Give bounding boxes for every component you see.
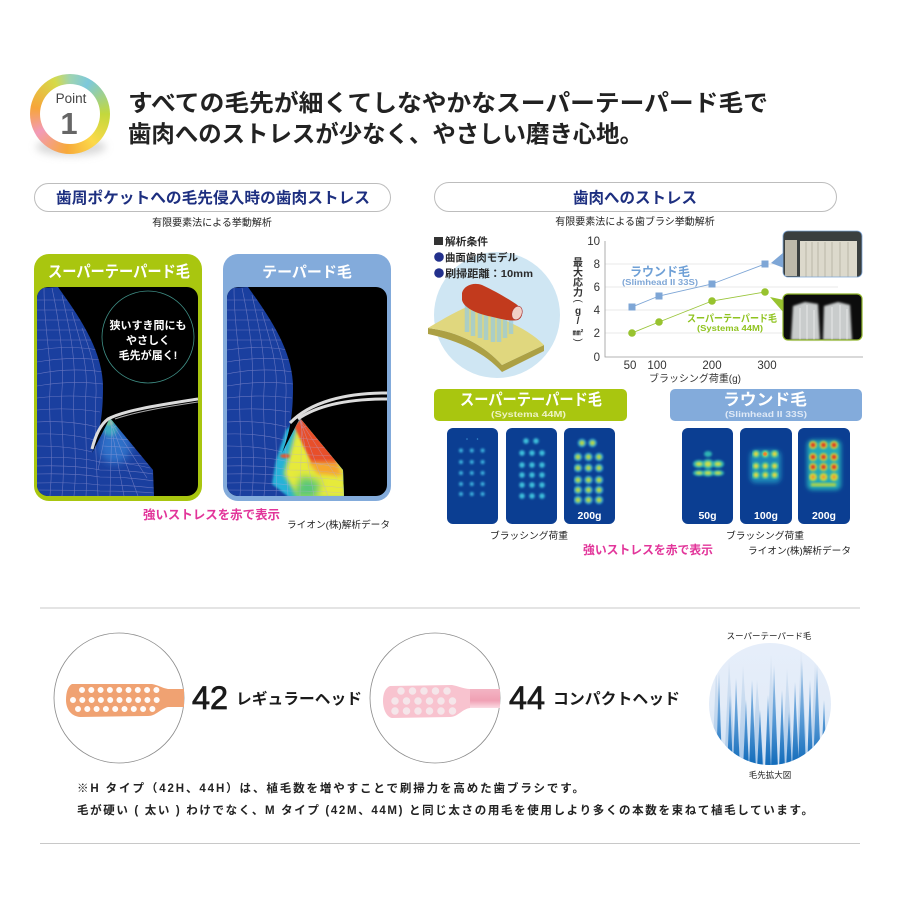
label: 44 compact head: [509, 680, 680, 716]
header: super tapered Systema 44M: (Systema 44M): [491, 409, 566, 419]
y axis labels: 10: [587, 236, 600, 248]
gum model: high stress: [227, 287, 387, 498]
badge: Point 1: Point: [56, 91, 87, 106]
subheading left: 有限要素法による挙動解析: [152, 216, 272, 229]
illustration: bristle tips enlarged: [709, 643, 831, 770]
y axis title: 応: [573, 277, 583, 289]
label: 42 regular head: 42: [192, 680, 228, 716]
badge: Point 1: 1: [60, 106, 78, 141]
y axis title: /: [577, 316, 580, 327]
heatmap: round 200g: 200g: [812, 510, 836, 522]
y axis labels: 6: [594, 282, 600, 294]
y axis title: 最: [573, 257, 583, 269]
label: brushing load right: ブラッシング荷重: [726, 530, 804, 542]
panel: super tapered bristle: [34, 254, 202, 501]
line chart: maximum stress vs brushing load: [572, 231, 863, 385]
photo: round bristle tips: [771, 231, 862, 277]
heading pill: gum stress in pocket: 歯周ポケットへの毛先侵入時の歯肉ストレス: [56, 188, 370, 207]
y axis labels: 0: [594, 352, 600, 364]
y axis title: (: [572, 299, 583, 303]
callout: reaches narrow gaps: 毛先が届く!: [119, 348, 177, 362]
label: 42 regular head: レギュラーヘッド: [236, 690, 362, 708]
series: super tapered bristle: スーパーテーパード毛: [687, 312, 777, 325]
y axis title: g: [575, 306, 581, 317]
heatmap: round 50g: 50g: [698, 510, 717, 522]
source note right: ライオン(株)解析データ: [748, 545, 851, 557]
note: red shows strong stress: 強いストレスを赤で表示: [143, 507, 280, 522]
x axis labels: [624, 360, 777, 372]
series: super tapered bristle: (Systema 44M): [697, 324, 763, 333]
y axis title: ㎜²: [573, 328, 584, 337]
panel: super tapered bristle: スーパーテーパード毛: [48, 263, 190, 281]
label: 44 compact head: 44: [509, 680, 545, 716]
label: enlarged tip view: 毛先拡大図: [749, 770, 791, 780]
analysis conditions: 刷掃距離：10mm: [445, 267, 533, 280]
y axis title: 力: [573, 286, 583, 299]
label: 44 compact head: コンパクトヘッド: [553, 690, 680, 708]
panel: tapered bristle: テーパード毛: [262, 264, 352, 281]
x axis labels: 50: [624, 360, 636, 372]
y axis labels: [587, 236, 601, 364]
note text: 毛が硬い ( 太い ) わけでなく、M タイプ (42M、44M) と同じ太さの用毛を使用しより多くの本数を束ねて植毛しています。: [77, 803, 813, 817]
heading pill: gum stress: 歯肉へのストレス: [573, 188, 697, 207]
x axis title: ブラッシング荷重(g): [649, 372, 741, 385]
heading pill: gum stress in pocket: [34, 184, 390, 212]
heatmap: super tapered 50g: [447, 428, 498, 524]
heatmap: round 100g: [740, 428, 792, 524]
photo: super tapered bristle tips: [770, 294, 862, 340]
heading pill: gum stress: [434, 182, 836, 212]
header: super tapered Systema 44M: [434, 389, 627, 421]
label: brushing load left: ブラッシング荷重: [490, 530, 568, 542]
analysis conditions: 曲面歯肉モデル: [445, 251, 518, 264]
header: round Slimhead II 33S: [670, 389, 862, 421]
y axis labels: 4: [594, 305, 601, 317]
circle: regular head brush: [54, 633, 184, 763]
heatmap: super tapered 100g: [506, 428, 557, 524]
y axis title: 大: [573, 266, 583, 279]
note text: ※H タイプ（42H、44H）は、植毛数を増やすことで刷掃力を高めた歯ブラシです。: [77, 781, 584, 795]
heatmap: round 50g: [682, 428, 733, 524]
callout: reaches narrow gaps: 狭いすき間にも: [110, 318, 186, 332]
y axis title: ): [572, 338, 583, 342]
header: super tapered Systema 44M: スーパーテーパード毛: [460, 391, 602, 409]
x axis labels: 300: [757, 360, 777, 372]
note: red shows strong stress: 強いストレスを赤で表示: [583, 542, 713, 557]
x axis labels: 100: [647, 360, 667, 372]
series: round bristle: ラウンド毛: [630, 264, 690, 279]
series: round bristle: (Slimhead II 33S): [622, 278, 698, 287]
header: round Slimhead II 33S: ラウンド毛: [723, 391, 807, 409]
series: round bristle: [622, 260, 768, 310]
header: round Slimhead II 33S: (Slimhead II 33S): [725, 409, 807, 419]
heatmap: super tapered 200g: [564, 428, 615, 524]
series: super tapered bristle: [628, 288, 777, 337]
label: super tapered bristle: スーパーテーパード毛: [727, 631, 812, 641]
y axis title: [572, 257, 584, 342]
circle: compact head brush: [370, 633, 500, 763]
title: すべての毛先が細くてしなやかなスーパーテーパード毛で: [128, 89, 768, 116]
y axis labels: 2: [594, 328, 600, 340]
y axis labels: 8: [594, 259, 600, 271]
heatmap: super tapered 200g: 200g: [578, 510, 601, 522]
label: 42 regular head: [192, 680, 362, 716]
callout: reaches narrow gaps: やさしく: [126, 334, 170, 347]
badge: Point 1: [30, 74, 110, 156]
callout: reaches narrow gaps: [102, 291, 194, 383]
subheading right: 有限要素法による歯ブラシ挙動解析: [555, 215, 715, 228]
illustration: brush on gum model: [428, 252, 560, 378]
analysis conditions: [434, 235, 533, 280]
heatmap: round 100g: 100g: [754, 510, 778, 522]
source note left: ライオン(株)解析データ: [287, 519, 390, 531]
panel: tapered bristle: [223, 254, 391, 501]
gum model: low stress: [37, 287, 198, 496]
note text: [77, 781, 813, 817]
x axis labels: 200: [702, 360, 722, 372]
analysis conditions: 解析条件: [445, 235, 489, 248]
title: [128, 89, 768, 147]
title: 歯肉へのストレスが少なく、やさしい磨き心地。: [128, 120, 643, 147]
heatmap: round 200g: [798, 428, 850, 524]
